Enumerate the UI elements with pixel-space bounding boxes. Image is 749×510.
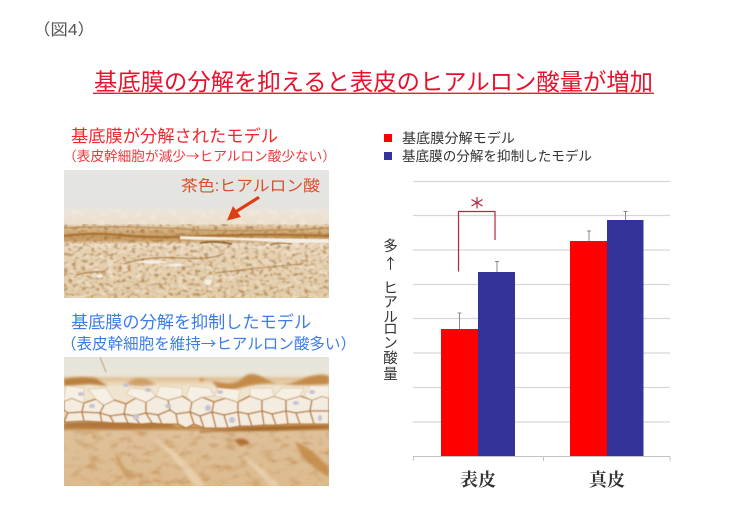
axis label: epidermis: 表皮: [460, 470, 496, 490]
heading: degraded model: 基底膜が分解されたモデル: [71, 126, 278, 146]
heading: suppressed model: 基底膜の分解を抑制したモデル: [71, 312, 311, 332]
y axis label: ル: [383, 310, 398, 326]
y axis label: ヒ: [383, 281, 398, 297]
title: 基底膜の分解を抑えると表皮のヒアルロン酸量が増加: [94, 69, 653, 95]
axis label: dermis: 真皮: [589, 470, 625, 490]
y axis label: [383, 237, 398, 383]
figure number: （図4）: [33, 21, 95, 39]
panel: degraded basement membrane model: [63, 126, 336, 298]
bar: dermis degraded: [570, 241, 607, 456]
y axis label: ア: [383, 295, 398, 311]
bar: epidermis suppressed: [478, 272, 515, 456]
y axis label: ン: [383, 336, 398, 352]
bar: dermis suppressed: [607, 220, 644, 456]
bar: epidermis degraded: [441, 329, 478, 456]
legend: [384, 130, 592, 164]
y axis label: 多: [383, 237, 398, 255]
error bars: [458, 212, 628, 329]
legend entry: degraded model: 基底膜分解モデル: [402, 130, 515, 146]
arrow: points to epidermis: [227, 196, 260, 220]
subheading: degraded model: （表皮幹細胞が減少→ヒアルロン酸少ない）: [63, 145, 336, 165]
panel: suppressed degradation model: [61, 312, 356, 486]
y axis label: 量: [383, 367, 398, 383]
micrograph: degraded model: [64, 170, 329, 298]
y axis label: 酸: [383, 350, 398, 367]
significance asterisk: [472, 197, 482, 208]
legend entry: suppressed model: 基底膜の分解を抑制したモデル: [402, 148, 592, 164]
micrograph: suppressed model: [64, 357, 329, 486]
label: brown is hyaluronic acid: 茶色:ヒアルロン酸: [181, 177, 320, 195]
significance bracket: [458, 212, 495, 272]
subheading: suppressed model: （表皮幹細胞を維持→ヒアルロン酸多い）: [61, 332, 356, 354]
y axis label: ロ: [383, 322, 398, 338]
bar chart: hyaluronic acid amount: [413, 182, 670, 490]
y axis label: ↑: [383, 253, 398, 274]
